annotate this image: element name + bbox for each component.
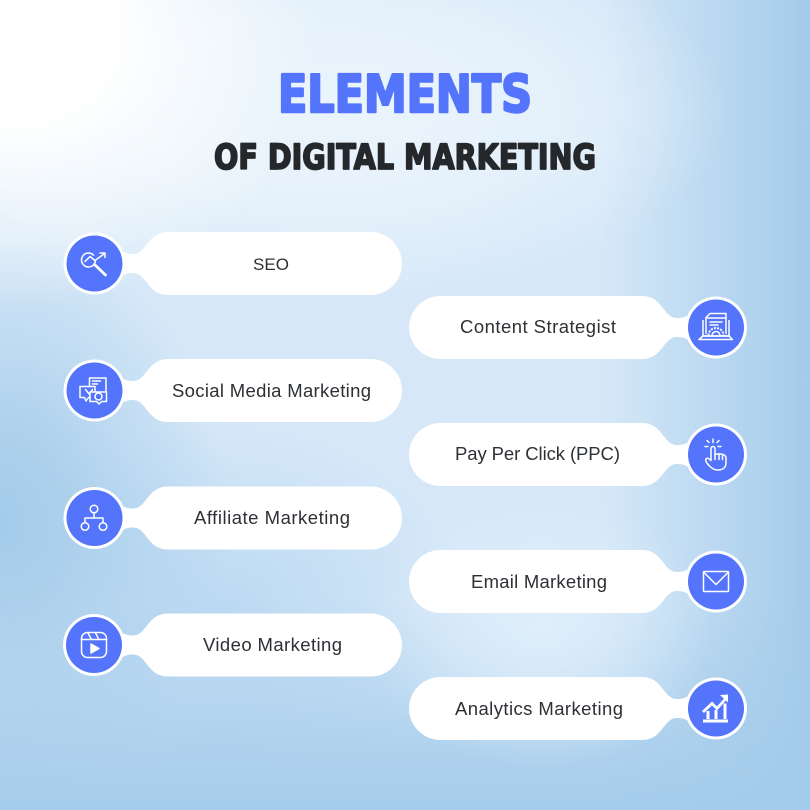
icon: hierarchy [81,505,107,530]
title [214,65,596,178]
panel: Content Strategist [409,296,747,359]
panel: Video Marketing [63,614,402,676]
panel: Email Marketing [409,550,747,613]
panel: SEO [64,232,402,295]
label: Pay Per Click (PPC): Pay Per Click (PPC) [455,443,620,464]
icon: video reel [82,632,106,658]
label: Analytics Marketing: Analytics Marketing [455,698,623,719]
heading: of digital marketing: OF DIGITAL MARKETING [214,138,596,178]
panel: Analytics Marketing [409,677,747,740]
panel: Affiliate Marketing [64,486,402,550]
label: Affiliate Marketing: Affiliate Marketing [194,507,350,528]
heading: elements: ELEMENTS [278,65,532,125]
icon: chat bubbles [80,378,106,404]
panel: Pay Per Click (PPC) [409,423,747,486]
icon: rising bar chart [703,694,728,722]
label: Video Marketing: Video Marketing [203,634,342,655]
icon: envelope [704,572,728,592]
icon: laptop with web page [699,314,732,340]
icon: clicking hand [705,439,726,470]
panel: Social Media Marketing [64,359,402,422]
icon: magnifier with growth arrow [82,253,106,275]
label: Content Strategist: Content Strategist [460,316,616,337]
label: Social Media Marketing: Social Media Marketing [172,380,371,401]
label: Email Marketing: Email Marketing [471,571,607,592]
label: SEO: SEO [253,255,289,274]
